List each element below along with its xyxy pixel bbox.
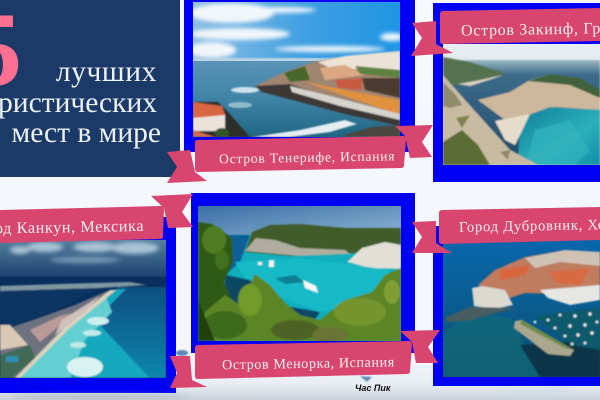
ribbon band: Menorca — [195, 341, 412, 379]
ribbon band: Dubrovnik — [439, 207, 600, 244]
panel: Tenerife — [184, 0, 415, 152]
panel: Dubrovnik — [433, 226, 600, 386]
ribbon: Menorca — [195, 221, 452, 379]
panel: Cancun — [0, 217, 176, 393]
decoration: blue trees — [176, 350, 372, 382]
source credit: Час Пик — [355, 383, 391, 393]
title text: лучших — [56, 56, 157, 88]
ribbon: Menorca: Остров Менорка, Испания — [222, 354, 395, 373]
photo: Cancun — [0, 240, 166, 378]
ribbon band: Zakynthos — [440, 8, 600, 44]
ribbon: Tenerife: Остров Тенерифе, Испания — [219, 148, 395, 166]
panel: Menorca — [191, 193, 415, 353]
ribbon tails: Zakynthos — [411, 21, 453, 56]
ribbon tails: Tenerife — [167, 125, 433, 183]
photo: Zakynthos — [443, 44, 600, 165]
panel: title — [0, 0, 180, 177]
title text — [0, 56, 161, 149]
ribbon band: Tenerife — [195, 136, 406, 172]
ribbon: Cancun — [0, 194, 207, 388]
ribbon tails: Cancun — [151, 194, 207, 388]
ribbon band: Cancun — [0, 206, 164, 243]
photo: Dubrovnik — [443, 240, 600, 377]
photo: Menorca — [198, 206, 401, 343]
photo: Tenerife — [188, 2, 404, 138]
title text: мест в мире — [12, 117, 161, 149]
snow hills — [10, 388, 572, 400]
ribbon tails: Menorca — [400, 221, 452, 363]
panel: Zakynthos — [433, 3, 600, 182]
ribbon: Zakynthos — [411, 8, 600, 56]
ribbon: Dubrovnik — [439, 207, 600, 244]
ribbon: Tenerife — [167, 125, 433, 183]
